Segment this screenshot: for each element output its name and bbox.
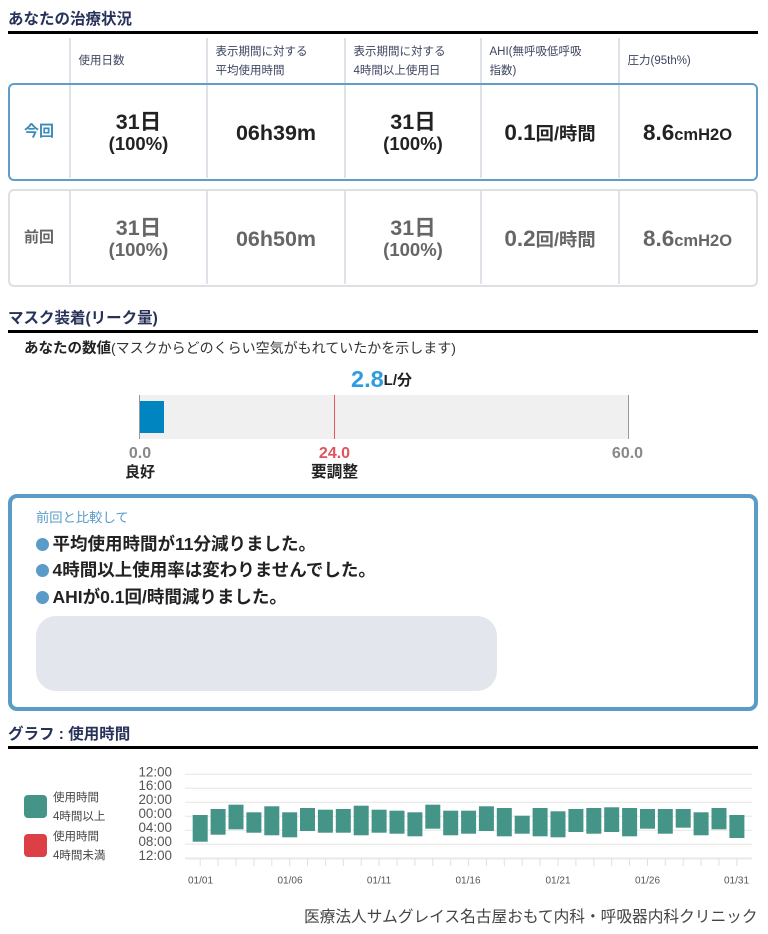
value: days over 4 hours: (100%) xyxy=(383,132,443,154)
gauge scale: 0.0 good: 良好 xyxy=(125,464,155,481)
y axis labels: 12:00 xyxy=(138,848,172,863)
text: your value subtitle: あなたの数値(マスクからどのくらい空気がもれていたかを示します) xyxy=(24,340,456,357)
value: AHI xyxy=(480,84,618,178)
gauge threshold marker xyxy=(334,395,335,439)
gauge scale: 24.0 needs adjustment: 要調整 xyxy=(311,464,358,481)
panel: treatment status table xyxy=(8,38,758,287)
y axis labels: 04:00 xyxy=(138,820,172,835)
chart: leak gauge bar xyxy=(139,395,629,439)
column header: days used: 使用日数 xyxy=(78,55,124,67)
heading: usage graph: グラフ : 使用時間 xyxy=(8,726,130,743)
value: average use time xyxy=(206,84,344,178)
legend item: under 4 hours xyxy=(24,830,105,862)
y axis labels xyxy=(138,764,172,863)
value: days over 4 hours xyxy=(344,190,480,284)
x axis date labels xyxy=(188,876,749,886)
heading: treatment status xyxy=(8,8,758,34)
heading: usage graph xyxy=(8,723,758,749)
legend item: under 4 hours: 使用時間 xyxy=(53,831,99,843)
value: AHI: 0.1回/時間 xyxy=(504,120,596,144)
column header: days used xyxy=(69,38,206,84)
value: pressure xyxy=(618,190,755,284)
row label: current: 今回 xyxy=(24,122,54,140)
gauge value fill xyxy=(140,401,164,433)
value: average use time xyxy=(206,190,344,284)
bullet: over 4 hours rate: 4時間以上使用率は変わりませんでした。 xyxy=(52,560,376,580)
y axis labels: 20:00 xyxy=(138,792,172,807)
value: AHI: 0.2回/時間 xyxy=(504,226,596,250)
legend item: 4 hours or more: 使用時間 xyxy=(53,792,99,804)
x axis date labels: 01/11 xyxy=(367,876,392,886)
value: average use time: 06h39m xyxy=(236,120,316,144)
column header: AHI: AHI(無呼吸低呼吸 xyxy=(490,46,582,58)
value: days used: 31日 xyxy=(116,216,161,240)
column header: days over 4 hours: 表示期間に対する xyxy=(354,46,446,58)
column header: average use time: 表示期間に対する xyxy=(216,46,308,58)
legend item: 4 hours or more xyxy=(24,791,105,823)
chart: daily usage time bars xyxy=(138,764,752,886)
value: days used xyxy=(69,190,206,284)
value: days used: (100%) xyxy=(109,132,168,154)
x axis date labels: 01/06 xyxy=(277,876,303,886)
bullet: AHI: AHIが0.1回/時間減りました。 xyxy=(52,587,287,607)
gauge scale: 0.0 good xyxy=(125,445,155,481)
column header: pressure xyxy=(618,38,758,84)
value: days used xyxy=(69,84,206,178)
value: pressure: 8.6cmH2O xyxy=(643,120,732,144)
gauge scale: 24.0 needs adjustment: 24.0 xyxy=(319,445,350,462)
footer: clinic name: 医療法人サムグレイス名古屋おもて内科・呼吸器内科クリニック xyxy=(304,909,758,926)
value: days used: 31日 xyxy=(116,110,161,134)
x axis date labels: 01/01 xyxy=(188,876,213,886)
table header row xyxy=(69,38,691,83)
column header: AHI xyxy=(480,38,618,84)
value: days over 4 hours: (100%) xyxy=(383,238,443,260)
row label: previous: 前回 xyxy=(24,228,54,246)
x axis date labels: 01/31 xyxy=(724,876,749,886)
value: days used: (100%) xyxy=(109,238,168,260)
gauge scale: 0.0 good: 0.0 xyxy=(129,445,151,462)
value: average use time: 06h50m xyxy=(236,226,316,250)
value: days over 4 hours xyxy=(344,84,480,178)
column header: average use time xyxy=(206,38,344,84)
row: previous period xyxy=(8,188,758,286)
y axis labels: 00:00 xyxy=(138,806,172,821)
y axis labels: 08:00 xyxy=(138,834,172,849)
heading: mask fit leak: マスク装着(リーク量) xyxy=(8,310,158,327)
empty comment box xyxy=(36,616,497,691)
y axis labels: 16:00 xyxy=(138,778,172,793)
row: current period xyxy=(8,82,758,180)
gauge scale: 60.0: 60.0 xyxy=(612,445,643,462)
panel title: 前回と比較して xyxy=(36,510,129,525)
heading: treatment status: あなたの治療状況 xyxy=(8,11,132,28)
legend: usage time xyxy=(24,791,105,862)
legend item: under 4 hours: 4時間未満 xyxy=(53,850,105,862)
column header: average use time: 平均使用時間 xyxy=(216,64,284,76)
value: pressure xyxy=(618,84,755,178)
bullet: average use: 平均使用時間が11分減りました。 xyxy=(52,534,316,554)
gauge scale: 24.0 needs adjustment xyxy=(311,445,358,481)
x axis date labels: 01/21 xyxy=(545,876,571,886)
y axis labels: 12:00 xyxy=(138,764,172,779)
column header: AHI: 指数) xyxy=(490,64,516,76)
value: leak rate: 2.8L/分 xyxy=(351,366,412,392)
value: AHI xyxy=(480,190,618,284)
value: pressure: 8.6cmH2O xyxy=(643,226,732,250)
x axis date labels: 01/26 xyxy=(635,876,660,886)
heading: mask fit leak xyxy=(8,307,758,333)
value: days over 4 hours: 31日 xyxy=(390,216,436,240)
column header: pressure: 圧力(95th%) xyxy=(628,55,691,67)
column header: days over 4 hours xyxy=(344,38,480,84)
usage bars xyxy=(193,805,744,842)
x axis date labels: 01/16 xyxy=(455,876,481,886)
value: days over 4 hours: 31日 xyxy=(390,110,436,134)
panel: comparison with previous xyxy=(8,494,758,711)
legend item: 4 hours or more: 4時間以上 xyxy=(53,811,105,823)
column header: days over 4 hours: 4時間以上使用日 xyxy=(354,64,440,76)
